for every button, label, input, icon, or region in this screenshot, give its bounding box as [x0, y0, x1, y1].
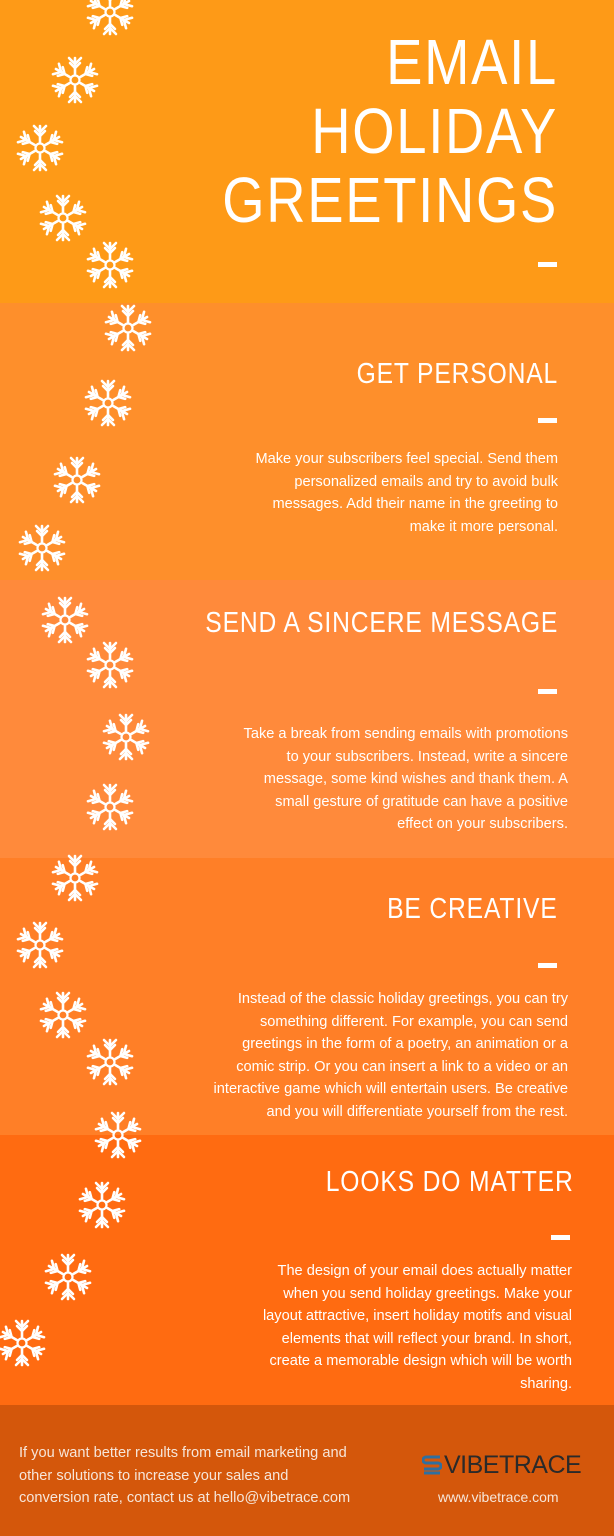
text: get personal [255, 451, 558, 534]
footer text: If you want better results from email marketing and [19, 1445, 347, 1461]
heading: get personal: GET PERSONAL [356, 358, 558, 390]
text: get personal: make it more personal. [410, 518, 558, 534]
text: looks do matter: elements that will reflect your brand. In short, [282, 1330, 572, 1346]
logo: vibetrace: VIBETRACE [444, 1451, 581, 1479]
text: looks do matter [263, 1263, 572, 1392]
text: sincere message: Take a break from sending emails with promotions [244, 726, 568, 742]
text: looks do matter: create a memorable design which will be worth [269, 1353, 572, 1369]
band: be creative [0, 858, 614, 1135]
title: GREETINGS [222, 164, 558, 236]
text: sincere message: message, some kind wishes and thank them. A [264, 771, 568, 787]
text: sincere message [244, 726, 568, 832]
text: get personal: messages. Add their name in the greeting to [272, 496, 558, 512]
title: HOLIDAY [311, 95, 558, 167]
text: be creative: greetings in the form of a poetry, an animation or a [242, 1036, 568, 1052]
title: EMAIL [386, 26, 558, 98]
footer url: www.vibetrace.com [438, 1489, 559, 1505]
footer text: conversion rate, contact us at hello@vibetrace.com [19, 1490, 350, 1506]
footer text [19, 1445, 350, 1506]
text: be creative: something different. For example, you can send [260, 1014, 568, 1030]
heading: looks do matter: LOOKS DO MATTER [326, 1166, 574, 1198]
text: be creative: and you will differentiate yourself from the rest. [267, 1104, 568, 1120]
band: looks do matter [0, 1135, 614, 1405]
footer text: other solutions to increase your sales and [19, 1468, 288, 1484]
header band [0, 0, 614, 303]
text: sincere message: small gesture of gratitude can have a positive [275, 794, 568, 810]
heading: sincere message: SEND A SINCERE MESSAGE [205, 607, 558, 639]
band: get personal [0, 303, 614, 580]
heading: be creative: BE CREATIVE [387, 893, 558, 925]
text: be creative: interactive game which will entertain users. Be creative [214, 1081, 568, 1097]
text: sincere message: effect on your subscribers. [397, 816, 568, 832]
text: be creative: Instead of the classic holiday greetings, you can try [238, 991, 568, 1007]
text: be creative [214, 991, 568, 1120]
text: sincere message: to your subscribers. Instead, write a sincere [287, 748, 568, 764]
text: looks do matter: The design of your email does actually matter [278, 1263, 572, 1279]
text: looks do matter: layout attractive, insert holiday motifs and visual [263, 1308, 572, 1324]
text: looks do matter: when you send holiday greetings. Make your [283, 1286, 572, 1302]
title [222, 26, 558, 236]
text: looks do matter: sharing. [520, 1376, 572, 1392]
snowflakes [0, 0, 152, 1366]
footer band [0, 1405, 614, 1536]
text: get personal: Make your subscribers feel special. Send them [255, 451, 558, 467]
band: sincere message [0, 580, 614, 858]
text: get personal: personalized emails and try to avoid bulk [294, 474, 558, 490]
text: be creative: comic strip. Or you can insert a link to a video or an [236, 1058, 568, 1074]
